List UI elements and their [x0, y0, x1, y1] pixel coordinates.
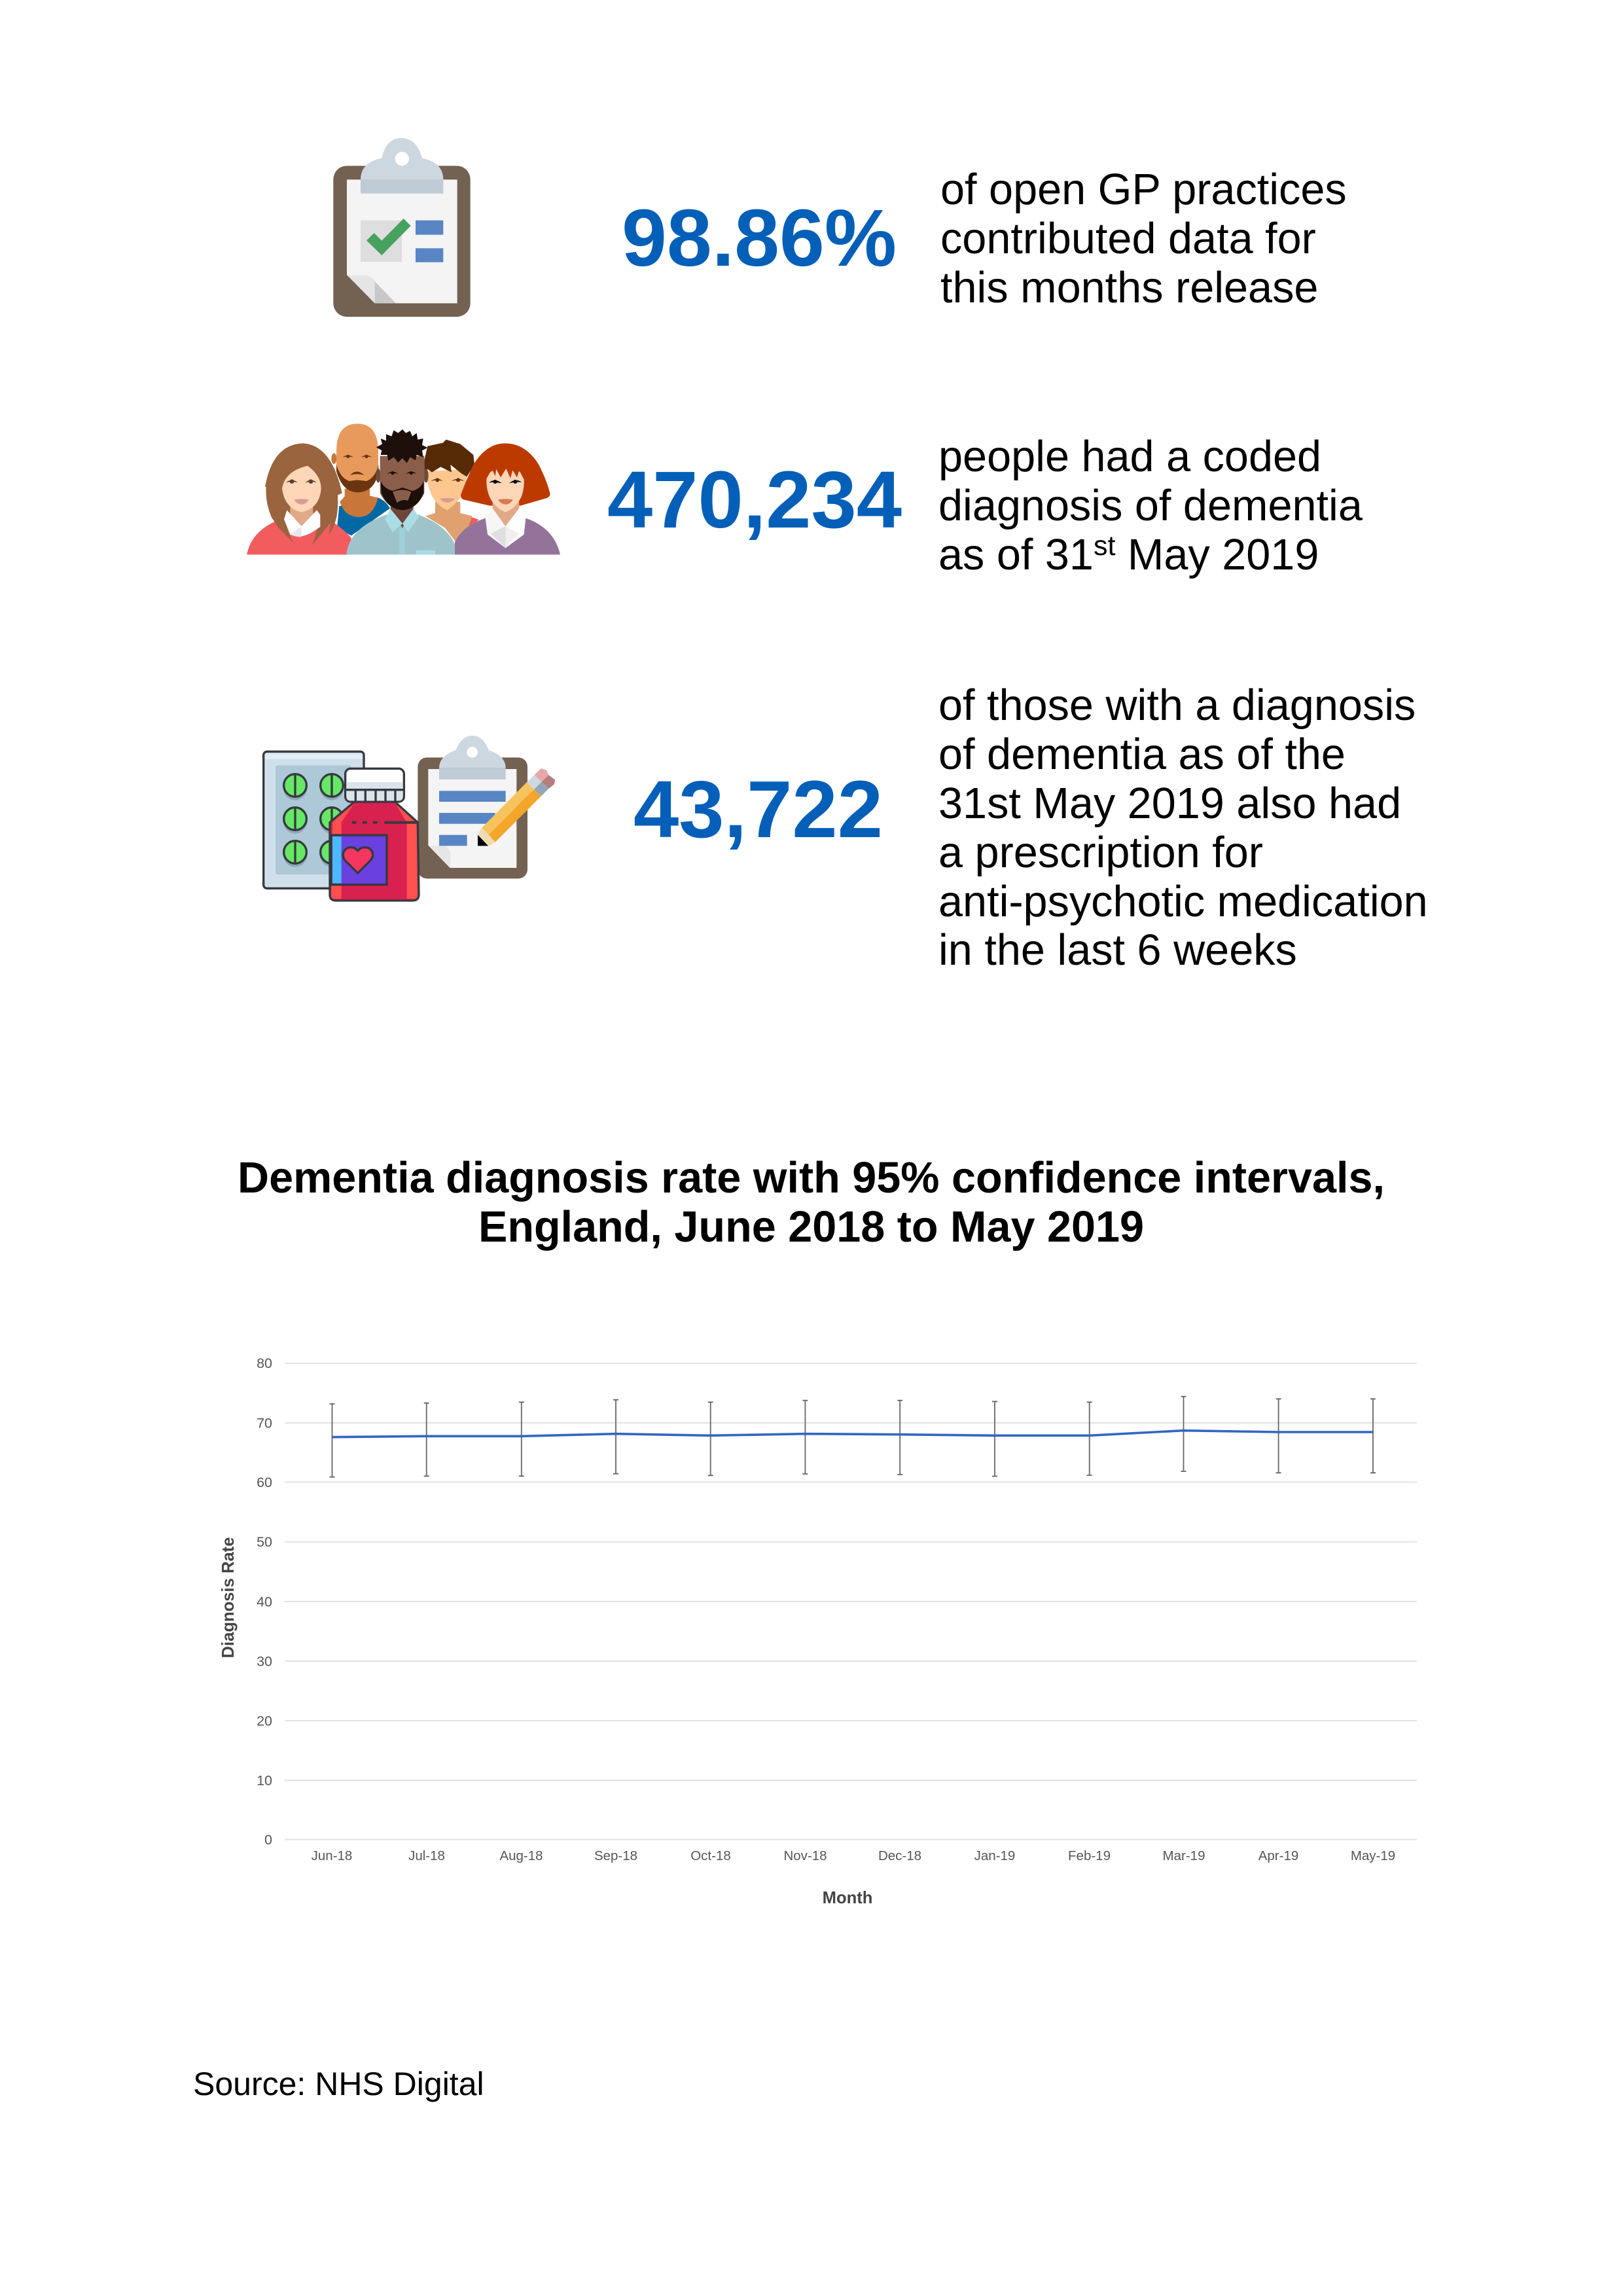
blister pack — [264, 751, 364, 888]
icon: group of five people — [247, 423, 560, 554]
text: anti-psychotic prescription: of those with a diagnosis — [938, 681, 1416, 730]
y axis labels: 80 — [257, 1355, 272, 1371]
big number: 98.86%: 98.86% — [622, 194, 897, 283]
text: coded diagnosis of dementia: people had a coded — [938, 433, 1321, 481]
chart title: England, June 2018 to May 2019 — [478, 1203, 1144, 1251]
text: coded diagnosis of dementia: May 2019 — [1115, 531, 1319, 579]
bald man — [331, 423, 390, 535]
x axis labels: Aug-18 — [499, 1848, 543, 1863]
y axis labels: 10 — [257, 1772, 272, 1788]
x axis labels: Apr-19 — [1258, 1848, 1298, 1863]
y axis labels — [257, 1355, 272, 1848]
x axis title: Month — [823, 1889, 872, 1907]
text: open GP practices: contributed data for — [940, 215, 1316, 263]
x axis labels — [312, 1848, 1395, 1863]
woman with long brown hair — [247, 443, 351, 554]
text: open GP practices: of open GP practices — [940, 166, 1347, 214]
x axis labels: Jul-18 — [408, 1848, 445, 1863]
woman with red bob — [455, 443, 560, 554]
short-haired woman — [424, 440, 479, 542]
y axis title: Diagnosis Rate — [219, 1537, 238, 1658]
y axis labels: 60 — [257, 1475, 272, 1490]
x axis labels: Jan-19 — [974, 1848, 1015, 1863]
icon: medication and prescription clipboard — [264, 736, 555, 901]
text: anti-psychotic prescription: anti-psychotic medication — [938, 878, 1428, 926]
line chart with error bars — [219, 1355, 1417, 1907]
x axis labels: Oct-18 — [690, 1848, 731, 1863]
chart title: Dementia diagnosis rate with 95% confidence intervals, — [238, 1154, 1385, 1202]
y axis labels: 50 — [257, 1534, 272, 1550]
text: anti-psychotic prescription: 31st May 2019 also had — [938, 780, 1401, 828]
y axis grid — [285, 1363, 1417, 1839]
big number: 43,722: 43,722 — [633, 765, 883, 855]
source note: Source: NHS Digital — [193, 2066, 484, 2102]
y axis labels: 30 — [257, 1653, 272, 1669]
y axis labels: 20 — [257, 1713, 272, 1729]
text: anti-psychotic prescription: of dementia as of the — [938, 730, 1346, 779]
medicine bottle — [330, 768, 419, 901]
pencil — [478, 768, 555, 846]
y axis labels: 0 — [264, 1832, 272, 1848]
icon: clipboard with checkmark — [333, 138, 471, 317]
text: coded diagnosis of dementia: as of 31 — [938, 530, 1319, 579]
x axis labels: Mar-19 — [1163, 1848, 1205, 1863]
x axis labels: May-19 — [1351, 1848, 1395, 1863]
x axis labels: Dec-18 — [878, 1848, 921, 1863]
text: coded diagnosis of dementia: diagnosis of dementia — [938, 482, 1363, 530]
big number: 470,234: 470,234 — [607, 456, 902, 545]
x axis labels: Jun-18 — [312, 1848, 352, 1863]
diagnosis rate line — [332, 1431, 1373, 1437]
text: anti-psychotic prescription: in the last 6 weeks — [938, 926, 1297, 975]
y axis labels: 40 — [257, 1594, 272, 1610]
front man with beard — [346, 429, 457, 554]
text: coded diagnosis of dementia: st — [1094, 530, 1115, 562]
error bars — [330, 1397, 1376, 1477]
x axis labels: Feb-19 — [1068, 1848, 1111, 1863]
prescription clipboard — [418, 736, 527, 878]
y axis labels: 70 — [257, 1415, 272, 1431]
text: anti-psychotic prescription: a prescription for — [938, 829, 1263, 877]
x axis labels: Sep-18 — [594, 1848, 637, 1863]
text: open GP practices: this months release — [940, 264, 1318, 312]
x axis labels: Nov-18 — [783, 1848, 827, 1863]
